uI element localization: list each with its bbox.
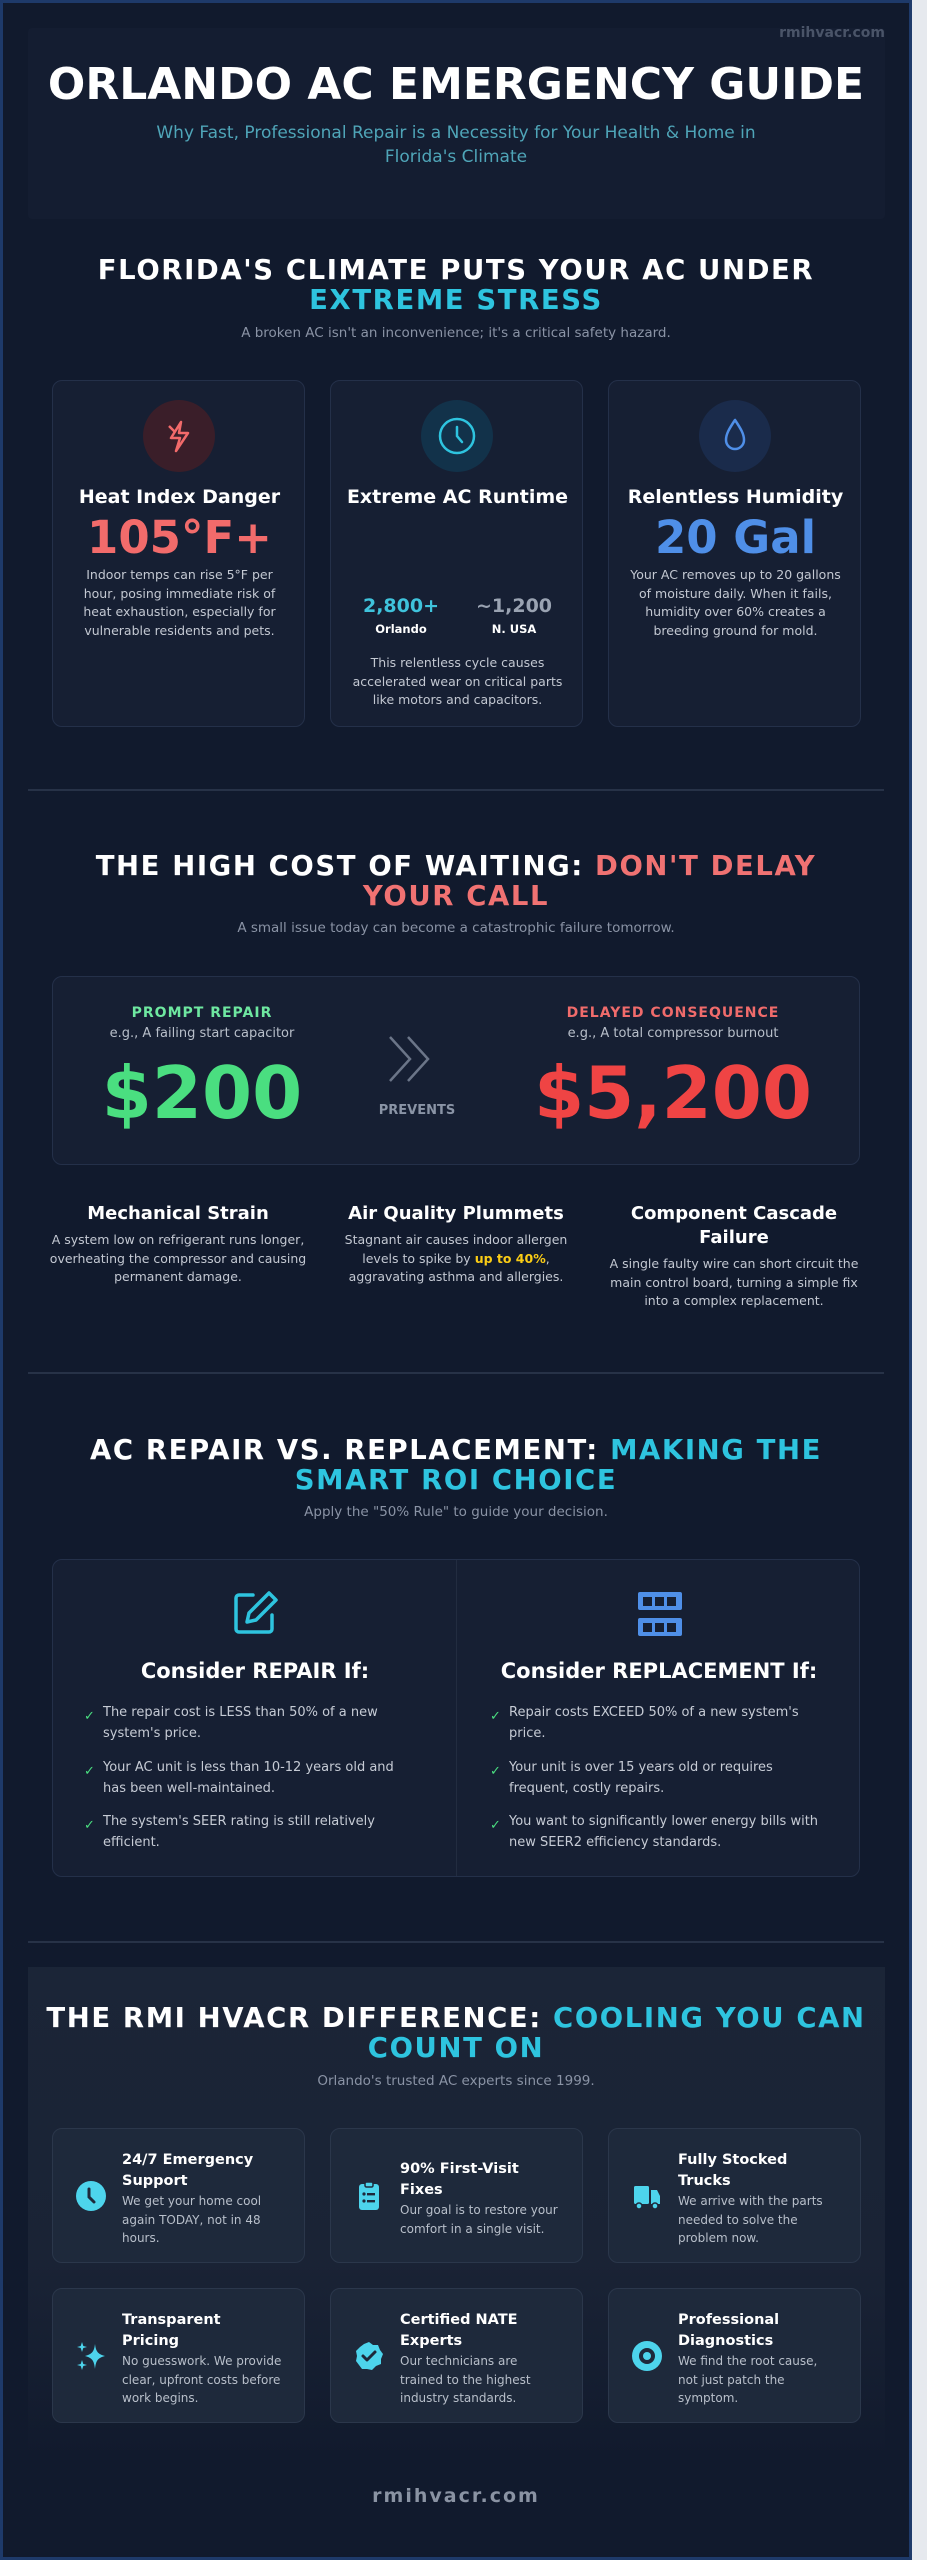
section 3 subtitle: Apply the "50% Rule" to guide your decision. (304, 1504, 608, 1520)
card title: Heat Index Danger (79, 486, 280, 508)
replacement column: Your unit is over 15 years old or requires (509, 1760, 773, 1775)
description: vulnerable residents and pets. (84, 622, 275, 638)
description (83, 567, 276, 638)
section 2 heading (96, 850, 816, 912)
watermark: rmihvacr.com top: rmihvacr.com (779, 25, 885, 41)
big number: 20 Gal (655, 511, 816, 564)
section 4 heading: COUNT ON (368, 2032, 544, 2064)
feature: trucks (608, 2128, 861, 2263)
feature: diagnostics: Diagnostics (678, 2333, 773, 2349)
feature: first visit: 90% First-Visit (400, 2161, 519, 2177)
description: humidity over 60% creates a (645, 604, 826, 619)
section 1 heading: FLORIDA'S CLIMATE PUTS YOUR AC UNDER (98, 254, 814, 286)
feature: 24/7: hours. (122, 2231, 160, 2245)
stat: Orlando: Orlando (375, 622, 427, 636)
subtitle (156, 123, 756, 167)
section 4 heading: THE RMI HVACR DIFFERENCE: COOLING YOU CAN (46, 2002, 866, 2034)
feature: NATE: Our technicians are (400, 2354, 517, 2368)
card title: Extreme AC Runtime (347, 486, 568, 508)
stat: N. USA: N. USA (492, 622, 536, 636)
icon: edit (234, 1591, 278, 1634)
description: Indoor temps can rise 5°F per (86, 567, 273, 582)
column: component cascade: Component Cascade (631, 1203, 837, 1224)
section 2 heading: THE HIGH COST OF WAITING: DON'T DELAY (96, 850, 816, 882)
repair column: Your AC unit is less than 10-12 years old and (103, 1760, 394, 1775)
feature: 24/7: 24/7 Emergency (122, 2152, 253, 2168)
replacement column: You want to significantly lower energy bills with (509, 1814, 818, 1829)
feature: NATE: industry standards. (400, 2391, 516, 2405)
feature: NATE (330, 2288, 583, 2423)
feature: first visit (330, 2128, 583, 2263)
footer: rmihvacr.com (372, 2485, 540, 2507)
delayed consequence block (567, 1005, 779, 1041)
section 4 subtitle: Orlando's trusted AC experts since 1999. (317, 2073, 595, 2089)
delayed consequence block: e.g., A total compressor burnout (568, 1026, 778, 1041)
panel: repair vs replacement (52, 1559, 860, 1877)
repair column: The system's SEER rating is still relatively (103, 1814, 375, 1829)
feature: trucks: Trucks (678, 2173, 731, 2189)
description: heat exhaustion, especially for (83, 604, 276, 619)
$200: $200 (102, 1051, 302, 1135)
column: air quality: Air Quality Plummets (348, 1203, 564, 1224)
repair column: has been well-maintained. (103, 1781, 275, 1796)
icon: eye (632, 2341, 662, 2371)
panel: cost comparison (52, 976, 860, 1165)
stat: Orlando (363, 595, 439, 636)
repair column: ✓ (84, 1764, 95, 1779)
column: air quality (345, 1203, 567, 1284)
feature: diagnostics: symptom. (678, 2391, 738, 2405)
list: price. (509, 1726, 546, 1741)
icon: clock (76, 2181, 106, 2211)
column: component cascade: Failure (699, 1227, 769, 1248)
list: Repair costs EXCEED 50% of a new system's (509, 1705, 799, 1720)
feature: diagnostics (608, 2288, 861, 2423)
column: air quality: Stagnant air causes indoor allergen (345, 1232, 567, 1247)
description (353, 655, 562, 707)
section 3 heading (90, 1434, 822, 1496)
list: The repair cost is LESS than 50% of a new (103, 1705, 378, 1720)
feature: pricing: clear, upfront costs before (122, 2372, 280, 2386)
description: like motors and capacitors. (373, 692, 542, 707)
section 2 heading: YOUR CALL (363, 880, 549, 912)
section 4 heading (46, 2002, 866, 2064)
list (84, 1705, 378, 1741)
feature: 24/7: again TODAY, not in 48 (122, 2212, 261, 2226)
section 4 box (28, 1967, 885, 2457)
description: hour, posing immediate risk of (84, 586, 275, 600)
prompt repair block: e.g., A failing start capacitor (110, 1026, 294, 1041)
section 1 subtitle: A broken AC isn't an inconvenience; it's a critical safety hazard. (241, 325, 671, 341)
section 1 heading: EXTREME STRESS (309, 284, 603, 316)
list: system's price. (103, 1726, 201, 1741)
icon: sparkles (77, 2342, 105, 2370)
column: mechanical strain (50, 1203, 306, 1284)
column: mechanical strain: permanent damage. (114, 1269, 242, 1284)
column: component cascade: into a complex replacement. (644, 1293, 824, 1308)
subtitle: Florida's Climate (385, 147, 527, 167)
column: mechanical strain: A system low on refrigerant runs longer, (52, 1232, 304, 1247)
feature: trucks: Fully Stocked (678, 2152, 787, 2168)
column: air quality: levels to spike by up to 40%, (362, 1250, 550, 1266)
icon: clock (421, 400, 493, 472)
icon: badge check (356, 2342, 383, 2370)
$5,200: $5,200 (534, 1051, 812, 1135)
repair column: efficient. (103, 1835, 160, 1850)
repair column: ✓ (84, 1818, 95, 1833)
description: accelerated wear on critical parts (353, 674, 562, 688)
icon: lightning (143, 400, 215, 472)
PREVENTS: PREVENTS (379, 1103, 455, 1118)
repair column (84, 1591, 394, 1850)
feature: trucks: needed to solve the (678, 2212, 798, 2226)
column: component cascade: main control board, turning a simple fix (610, 1274, 858, 1290)
feature: pricing: Transparent (122, 2312, 221, 2328)
list (490, 1705, 799, 1741)
section 3 heading: SMART ROI CHOICE (295, 1464, 617, 1496)
feature: pricing: No guesswork. We provide (122, 2354, 281, 2368)
replacement column: ✓ (490, 1818, 501, 1833)
replacement column: ✓ (490, 1709, 501, 1724)
column: mechanical strain: Mechanical Strain (87, 1203, 269, 1224)
subtitle: Why Fast, Professional Repair is a Necessity for Your Health & Home in (156, 123, 756, 143)
card title: Relentless Humidity (628, 486, 843, 508)
repair column: ✓ (84, 1709, 95, 1724)
feature: NATE: Experts (400, 2333, 462, 2349)
icon: drop (699, 400, 771, 472)
icon: units (638, 1592, 682, 1636)
big number: 105°F+ (87, 511, 272, 564)
feature: first visit: comfort in a single visit. (400, 2222, 544, 2236)
icon: clipboard (359, 2182, 379, 2210)
feature: first visit: Fixes (400, 2182, 443, 2198)
feature: 24/7: Support (122, 2173, 188, 2189)
feature: diagnostics: We find the root cause, (678, 2354, 817, 2368)
replacement column: frequent, costly repairs. (509, 1781, 664, 1796)
replacement column (490, 1592, 818, 1850)
feature: trucks: problem now. (678, 2231, 759, 2245)
feature: diagnostics: Professional (678, 2312, 779, 2328)
arrow: chevrons (389, 1036, 430, 1082)
feature: diagnostics: not just patch the (678, 2372, 785, 2386)
card: runtime (330, 380, 583, 727)
stat: N. USA (476, 595, 552, 636)
stat: N. USA: ~1,200 (476, 595, 552, 617)
column: component cascade: A single faulty wire can short circuit the (610, 1256, 858, 1271)
feature: pricing: work begins. (122, 2391, 198, 2405)
title: Consider REPAIR If: (141, 1659, 369, 1683)
feature: NATE: Certified NATE (400, 2312, 518, 2328)
feature: trucks: We arrive with the parts (678, 2194, 823, 2208)
replacement column: new SEER2 efficiency standards. (509, 1835, 721, 1850)
delayed consequence block: DELAYED CONSEQUENCE (567, 1005, 779, 1021)
feature: 24/7 (52, 2128, 305, 2263)
title: Consider REPLACEMENT If: (501, 1659, 817, 1683)
section 1 heading (98, 254, 814, 316)
icon: truck (634, 2186, 660, 2208)
description: breeding ground for mold. (654, 622, 817, 638)
feature: pricing (52, 2288, 305, 2423)
feature: 24/7: We get your home cool (122, 2194, 261, 2208)
feature: first visit: Our goal is to restore your (400, 2203, 558, 2217)
prompt repair block (110, 1005, 294, 1041)
feature: pricing: Pricing (122, 2333, 179, 2349)
card: heat index (52, 380, 305, 727)
header box (28, 28, 885, 219)
section 3 heading: AC REPAIR VS. REPLACEMENT: MAKING THE (90, 1434, 822, 1466)
description: Your AC removes up to 20 gallons (630, 567, 841, 582)
column: air quality: aggravating asthma and allergies. (349, 1269, 563, 1284)
title: ORLANDO AC EMERGENCY GUIDE (48, 59, 864, 110)
description (630, 567, 841, 638)
description: of moisture daily. When it fails, (639, 586, 832, 600)
stat: Orlando: 2,800+ (363, 595, 439, 617)
card: humidity (608, 380, 861, 727)
prompt repair block: PROMPT REPAIR (132, 1005, 272, 1021)
section 2 subtitle: A small issue today can become a catastrophic failure tomorrow. (237, 920, 675, 936)
feature: NATE: trained to the highest (400, 2372, 531, 2386)
column: mechanical strain: overheating the compressor and causing (50, 1250, 306, 1266)
replacement column: ✓ (490, 1764, 501, 1779)
description: This relentless cycle causes (371, 655, 544, 670)
column: component cascade (610, 1203, 858, 1308)
